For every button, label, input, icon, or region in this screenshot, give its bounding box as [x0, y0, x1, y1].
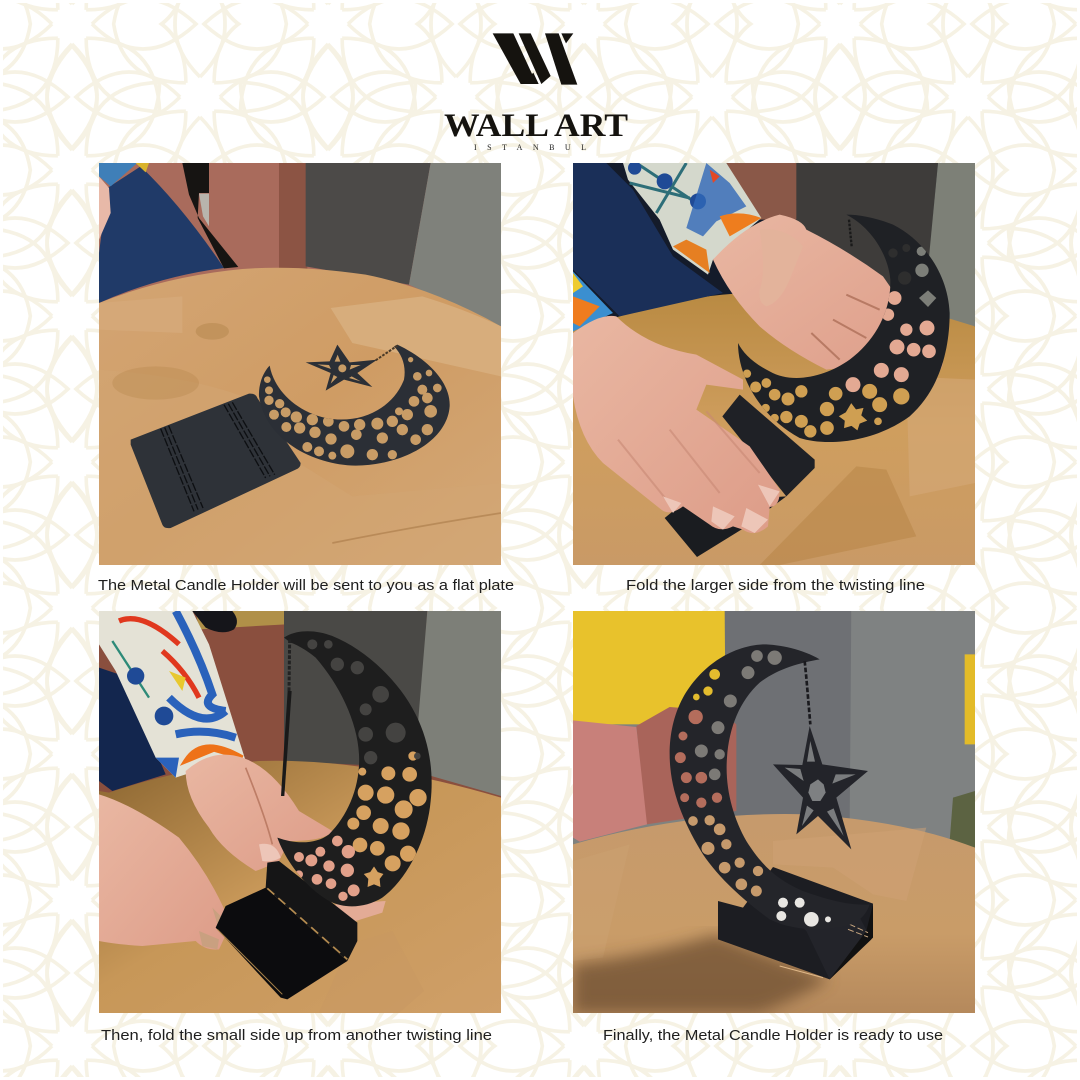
panel: step 3 folding small side photo — [99, 611, 501, 1013]
upper hand holding crescent — [713, 215, 943, 380]
crescent moon upright — [277, 631, 432, 906]
panel: step 4 finished candle holder photo — [573, 611, 975, 1013]
patterned sleeve — [99, 611, 246, 778]
panel: step 2 folding larger side photo — [573, 161, 975, 565]
chain — [805, 661, 810, 724]
table top — [99, 761, 501, 1013]
patterned sleeves — [573, 161, 761, 331]
chair — [182, 163, 238, 268]
moving metal plate — [665, 395, 815, 557]
table top — [573, 292, 975, 565]
lower hand flattening plate — [573, 316, 780, 533]
crescent moon assembled — [670, 644, 870, 929]
star flat — [306, 345, 397, 391]
panel: step 1 flat plate photo — [99, 163, 501, 565]
jeans — [99, 668, 166, 791]
hanging star — [773, 726, 868, 849]
flat metal plate — [131, 394, 301, 528]
metal base box — [718, 867, 873, 979]
table top — [99, 268, 501, 565]
star seen edge on with chain — [281, 639, 292, 796]
jeans — [573, 163, 723, 316]
left hand — [99, 794, 231, 950]
jeans — [99, 166, 224, 303]
shadow on table — [573, 934, 830, 1013]
chain — [849, 220, 852, 246]
logo icon: WM monogram — [493, 33, 577, 85]
logo wordmark: WALL ART — [444, 108, 628, 144]
caption: step 1: The Metal Candle Holder will be sent to you as a flat plate — [98, 577, 514, 594]
caption: step 2: Fold the larger side from the twisting line — [626, 577, 925, 594]
right hand — [186, 755, 332, 871]
crescent moon held — [738, 215, 950, 442]
chair seat — [192, 611, 237, 632]
table top — [573, 814, 975, 1013]
folded metal plate — [216, 861, 357, 999]
crescent moon flat — [259, 345, 450, 466]
pink block — [573, 707, 736, 842]
caption: step 3: Then, fold the small side up from another twisting line — [101, 1027, 492, 1044]
sleeve — [99, 163, 137, 186]
caption: step 4: Finally, the Metal Candle Holder is ready to use — [603, 1027, 943, 1044]
logo: Wall Art Istanbul — [444, 33, 628, 152]
hand edge — [99, 176, 111, 240]
logo subtitle: ISTANBUL — [474, 143, 586, 152]
